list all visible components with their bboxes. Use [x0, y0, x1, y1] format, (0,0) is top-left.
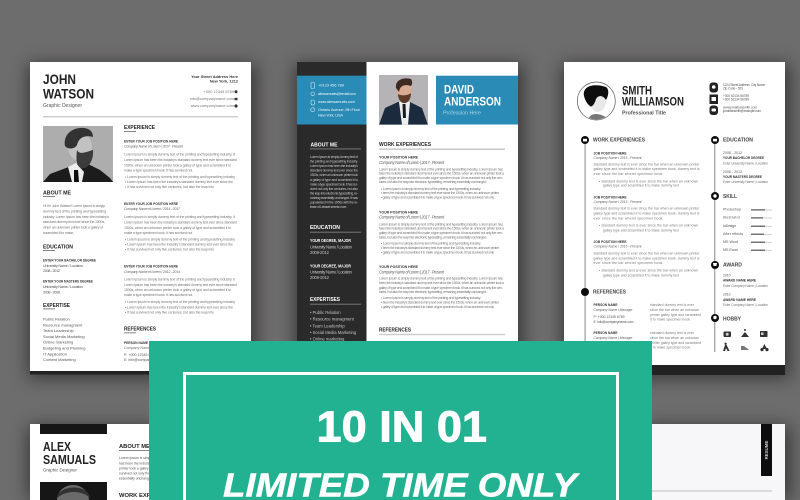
heading: name: ALEX: [43, 439, 71, 454]
reference entry: Company Name / Manager: [124, 346, 168, 350]
contact block: www.companyname.com: [191, 103, 234, 108]
heading: name: [622, 83, 684, 117]
job entry 2: Company Name of Lorem | 2017 - Present: [379, 215, 445, 220]
blue name header: DAVID: [444, 84, 474, 96]
job entry 3: Lorem Ipsum has been the industry's standard dummy text ever since standard: [124, 283, 237, 287]
expertise list: IT Application: [43, 352, 67, 356]
expertises list: • Public Relation: [310, 310, 341, 315]
expertises list: • Online marketing: [310, 337, 345, 342]
heading: references: REFERENCES: [379, 327, 411, 333]
job entry 2: 1500s, when an unknown printer took a galley of type and scrambled it to: [124, 226, 231, 230]
reference entry 1: E: info@companyname.com: [594, 320, 634, 324]
education entries: 2008 - 2012: [43, 269, 60, 273]
job entry 2: ever since the bar wheret specimen book.: [594, 216, 664, 220]
blue name header: ANDERSON: [444, 97, 501, 109]
reference entry 2: PERSON NAME: [594, 331, 618, 335]
education entries: [723, 151, 768, 184]
job entry 1: galley of type and scrambled it to make a type specimen book. It has survived not only five cen-: [379, 176, 504, 180]
heading: name: WATSON: [43, 87, 94, 102]
heading: references: REFERENCES: [593, 290, 626, 296]
job entry 2: • It has survived not only five centuries, but also the leap into: [125, 248, 214, 252]
education entries: University Name / Location: [310, 245, 353, 250]
education entries: 2008 - 2012: [723, 151, 742, 155]
heading: work experiences: [379, 142, 505, 150]
job entry 2: make a type specimen book. It has survived not.: [124, 231, 193, 235]
dark sidebar: [297, 62, 366, 352]
reference entry: P: +000 12345 6789: [124, 353, 156, 357]
heading: expertise: EXPERTISE: [43, 303, 70, 309]
heading: name: Graphic Designer: [43, 103, 82, 109]
reference entry 2: printer galley type and scrambled: [650, 341, 701, 345]
about text: make a type specimen book. It has sur-: [310, 182, 358, 186]
skill bars: Photoshop: [723, 208, 741, 212]
job entry 1: turies, but also the leap into electronic typesetting, remaining essentially unchanged.: [379, 180, 487, 184]
reference entry 2: since the bar when an unknown: [650, 336, 699, 340]
contact block: jonathansmith@example.com: [722, 109, 761, 113]
job entry 1: galley type and scrambled it to make specimen book, dummy text is: [594, 167, 700, 171]
expertise list: Team Leadership: [43, 328, 74, 333]
education entries: University Name / Location: [43, 285, 83, 289]
about text: essentially unchanged.: [119, 477, 154, 481]
banner heading: 10 IN 01: [316, 403, 487, 452]
expertise list: Social Media Marketing: [43, 334, 85, 339]
job entry 1: [594, 151, 700, 188]
heading: name: Professional Title: [622, 111, 666, 117]
job entry 3: JOB POSITION HERE: [594, 240, 627, 244]
job entry 3: galley of type and scrambled it to make a type specimen book. It has survived not only five cen-: [379, 286, 504, 290]
about text: standard dummy text ever since the: [310, 169, 358, 173]
reference entry 1: Company Name I Manager: [594, 308, 633, 312]
reference entry 2: [594, 331, 701, 350]
heading: education: EDUCATION: [43, 245, 73, 251]
reference entry 1: since the bar when an unknown: [650, 308, 699, 312]
job entry 2: [594, 196, 700, 232]
heading: expertises: EXPERTISES: [310, 297, 340, 303]
job entry 3: turies, but also the leap into electronic typesetting, remaining essentially unchanged.: [379, 290, 487, 294]
icon: education: [711, 136, 719, 144]
about text: Lorem Ipsum has been the industry's: [310, 164, 358, 168]
heading: about me: [310, 142, 361, 149]
job entry 2: • been the industry's standard dummy text ever since the 1500s, when an unknown printer: [381, 246, 500, 250]
expertise list: [43, 317, 85, 362]
job entry 3: [379, 264, 504, 309]
expertises list: [310, 310, 357, 342]
education entries: University Name / Location: [310, 269, 353, 274]
job entry 2: • galley of type and scrambled it to make a type specimen book. It has survived not only: [381, 250, 494, 254]
job entry 2: • Lorem Ipsum is simply dummy text of the printing and typesetting industry.: [381, 242, 481, 246]
job entry 1: • It has survived not only five centuries, but also the leap into: [125, 185, 214, 189]
job entry 2: Lorem Ipsum is simply dummy text of the printing and typesetting industry. Lorem Ipsum has: [379, 222, 503, 226]
job entry 3: 1500s, when an unknown printer took a galley of type and scrambled it to: [124, 288, 231, 292]
job entry 1: • Lorem Ipsum is simply dummy text of the printing and typesetting industry.: [381, 187, 481, 191]
skill bars: Illustrator: [723, 216, 741, 220]
job entry 3: • Lorem Ipsum has been the industry's standard dummy text ever since the: [125, 306, 233, 310]
award entries: 2010: [723, 293, 731, 297]
job entry 1: • Lorem Ipsum is simply dummy text of the printing and typesetting industry: [125, 175, 235, 179]
job entry 3: [124, 265, 237, 314]
job entry 1: Lorem Ipsum has been the industry's standard dummy text ever since standard: [124, 158, 237, 162]
expertises list: • Resource managment: [310, 316, 355, 322]
skill bars: InDesign: [723, 224, 736, 228]
job entry 1: Lorem Ipsum is simply dummy text of the printing and typesetting industry. It: [124, 153, 235, 157]
panel: John Watson resume: [30, 62, 251, 374]
job entry 1: 1500s, when an unknown printer took a galley of type and scrambled it to: [124, 164, 231, 168]
skill bars: MS Word: [723, 240, 738, 244]
education entries: YOUR DEGREE, MAJOR: [310, 238, 351, 243]
job entry 1: • Lorem Ipsum has been the industry's standard dummy text ever since the: [125, 180, 233, 184]
job entry 2: turies, but also the leap into electronic typesetting, remaining essentially unchanged.: [379, 236, 487, 240]
contact block: +000 52134 56789: [723, 98, 749, 102]
about text: has been the industry's: [119, 461, 154, 465]
about text: Lorem Ipsum is simply: [119, 456, 153, 460]
contact block: +000 52134 56789: [723, 94, 749, 98]
job entry 1: • been the industry's standard dummy text ever since the 1500s, when an unknown printer: [381, 191, 500, 195]
reference entry 1: it to make specimen book.: [650, 318, 691, 322]
about text: Hi I'm John Watson! Lorem Ipsum is simply: [43, 204, 105, 208]
job entry 1: • galley of type and scrambled it to make a type specimen book. It has survived not only: [381, 195, 494, 199]
education entries: 2008 - 2008: [43, 290, 60, 294]
blue name header: [436, 76, 518, 124]
job entry 1: Company Name of Lorem | 2017 - Present: [379, 160, 445, 165]
reference entry 1: standard dummy text is ever: [650, 303, 695, 307]
icon: work experiences: [581, 136, 589, 144]
job entry 1: galley type and scrambled it to make dummy text: [603, 184, 679, 188]
blue contact band: +0123 456 789: [318, 83, 345, 88]
blue name header: Profession Here: [443, 110, 481, 116]
skill bars: MS Excel: [723, 248, 738, 252]
expertise list: Online marketing: [43, 340, 73, 344]
job entry 1: standard dummy text is ever since the bar when an unknown printer: [594, 162, 700, 166]
job entry 3: Company Name I 2015 - Present: [594, 245, 643, 249]
job entry 1: • standard dummy text is ever since the bar when an unknown: [599, 179, 698, 183]
heading: name: Graphic Designer: [43, 468, 77, 474]
job entry 2: [124, 202, 237, 252]
photo: bearded man: [43, 126, 113, 182]
award entries: Enter Company Name | Location: [723, 303, 768, 307]
job entry 2: standard dummy text is ever since the bar when an unknown printer: [594, 207, 700, 211]
job entry 1: [379, 155, 504, 199]
reference entry: PERSON NAME: [124, 341, 149, 345]
heading: skill: SKILL: [723, 194, 738, 200]
education entries: 2008 - 2012: [723, 170, 742, 174]
job entry 3: ENTER YOUR JOB POSITION HERE: [124, 265, 179, 269]
reference entry 1: printer galley type and scrambled: [650, 313, 701, 317]
blue contact band: New York, USA: [318, 112, 343, 118]
about text: scrambled it to make.: [43, 231, 74, 235]
about text: [310, 155, 358, 209]
heading: education: EDUCATION: [310, 225, 340, 231]
panel: fifth resume with vertical tab: [640, 424, 785, 500]
job entry 2: • Lorem Ipsum is simply dummy text of the printing and typesetting industry: [125, 238, 235, 242]
expertise list: Resource managment: [43, 322, 83, 328]
job entry 3: • It has survived not only five centuries, but also the leap into: [125, 310, 214, 314]
expertises list: • Team Leadership: [310, 323, 345, 328]
vertical black tab: RESUME: [764, 441, 769, 459]
icon: skill: [711, 192, 719, 200]
heading: references: REFERENCES: [124, 327, 156, 333]
heading: education: EDUCATION: [723, 137, 753, 143]
hobby icons: [723, 329, 769, 351]
job entry 3: Company Name of Lorem | 2017 - Present: [379, 269, 445, 274]
icon: references: [581, 288, 589, 296]
reference entry: [124, 341, 169, 362]
heading: work experience: WORK EXP: [119, 493, 151, 499]
blue contact band: alexsamuels@email.com: [318, 91, 357, 96]
job entry 3: [594, 240, 700, 278]
about text: popularised in the 1960s with the re-: [310, 201, 358, 205]
job entry 3: make a type specimen book. It has survived not.: [124, 293, 193, 297]
about text: survived not only five: [119, 472, 151, 476]
job entry 3: Lorem Ipsum is simply dummy text of the printing and typesetting industry. It: [124, 278, 235, 282]
about text: a galley of type and scrambled it to: [310, 178, 358, 182]
heading: name: WILLIAMSON: [622, 95, 684, 109]
heading: about me: ABOUT ME: [43, 191, 71, 197]
job entry 3: • galley of type and scrambled it to make a type specimen book. It has survived not only: [381, 305, 494, 309]
job entry 2: YOUR POSITION HERE: [379, 209, 418, 214]
photo: round portrait: [577, 82, 615, 120]
contact block: [710, 82, 765, 115]
job entry 1: ENTER YOUR JOB POSITION HERE: [124, 140, 179, 144]
job entry 1: Company Name of Lorem / 2017 - Present: [124, 145, 184, 149]
contact block: +000 12345 6789: [204, 89, 234, 94]
education entries: YOUR BACHELOR DEGREE: [723, 156, 765, 160]
expertises list: • Social Media Marketing: [310, 330, 357, 335]
about text: vived not only five centuries, but also: [310, 187, 358, 191]
heading: name: [43, 439, 96, 474]
job entry 2: galley type and scrambled it to make dummy text: [603, 228, 679, 232]
about text: [119, 456, 154, 481]
about text: Lorem Ipsum is simply dummy text of: [310, 155, 358, 159]
job entry 2: Lorem Ipsum has been the industry's standard dummy text ever since standard: [124, 220, 237, 224]
black header tab: [40, 424, 107, 434]
job entry 1: Lorem Ipsum is simply dummy text of the printing and typesetting industry. Lorem Ipsum has: [379, 167, 503, 171]
job entry 1: been the industry's standard dummy text ever since the 1500s, when an unknown printer took a: [379, 172, 504, 176]
heading: about me: ABOUT ME: [310, 142, 338, 148]
education entries: ENTER YOUR MASTERS DEGREE: [43, 280, 93, 284]
panel: Alex Samuals resume: [30, 424, 160, 500]
about text: maining essentially unchanged. It was: [310, 196, 358, 200]
photo: portrait: [40, 482, 107, 500]
job entry 2: Company Name of Lorem / 2014 - 2017: [124, 207, 181, 211]
reference entry 2: Company Name I Manager: [594, 336, 633, 340]
contact block: 1224 Street Address, City Name: [723, 83, 765, 87]
education entries: Enter University Name | Location: [723, 180, 768, 184]
job entry 3: • standard dummy text is ever since the bar when an unknown: [599, 269, 698, 273]
heading: work experiences: WORK EXPERIENCES: [593, 137, 646, 143]
about text: dummy text of the printing and typesetting: [43, 210, 106, 214]
job entry 2: • standard dummy text is ever since the bar when an unknown: [599, 224, 698, 228]
job entry 2: ENTER YOUR JOB POSITION HERE: [124, 202, 179, 206]
job entry 2: galley type and scrambled it to make specimen book, dummy text is: [594, 212, 700, 216]
award entries: AWARD NAME HERE: [723, 298, 757, 302]
heading: name: JOHN: [43, 72, 76, 87]
about text: printer took a galley of: [119, 466, 152, 470]
contact block: Zip Code - 523: [723, 87, 743, 91]
reference entry 2: standard dummy text is ever: [650, 331, 695, 335]
expertise list: Content Marketing: [43, 357, 76, 362]
heading: references: [379, 327, 505, 335]
heading: work experiences: WORK EXPERIENCES: [379, 142, 431, 148]
timeline lines: [584, 140, 586, 352]
job entry 1: YOUR POSITION HERE: [379, 155, 418, 160]
job entry 3: • been the industry's standard dummy text ever since the 1500s, when an unknown printer: [381, 300, 500, 304]
icon: award: [711, 261, 719, 269]
blue contact band: Ontario Avenue, 5th Floor: [318, 107, 361, 112]
education entries: YOUR DEGREE, MAJOR: [310, 263, 351, 268]
job entry 2: JOB POSITION HERE: [594, 196, 627, 200]
job entry 1: JOB POSITION HERE: [594, 151, 627, 155]
contact block: New York, 1212: [210, 78, 239, 84]
skill bars: After effects: [723, 232, 743, 236]
education entries: [310, 238, 353, 280]
job entry 3: galley type and scrambled it to make dummy text: [603, 274, 679, 278]
job entry 2: Lorem Ipsum is simply dummy text of the printing and typesetting industry. It: [124, 215, 235, 219]
vertical black tab: [761, 424, 772, 476]
about text: lease of Letraset sheets more.: [310, 205, 347, 209]
skill bars: [723, 208, 772, 252]
job entry 3: ever since the bar wheret specimen book.: [594, 261, 664, 265]
heading: name: SMITH: [622, 83, 652, 97]
reference entry 2: it to make specimen book.: [650, 346, 691, 350]
heading: experience: EXPERIENCE: [124, 125, 155, 131]
job entry 3: galley type and scrambled it to make specimen book, dummy text is: [594, 256, 700, 260]
expertise list: Budgeting and Planning: [43, 346, 85, 350]
about text: when an unknown printer took a galley of: [43, 226, 104, 230]
job entry 2: [379, 209, 504, 254]
about text: industry. Lorem Ipsum has been the industry's: [43, 215, 109, 219]
job entry 2: Company Name I 2015 - Present: [594, 200, 643, 204]
heading: award: AWARD: [723, 263, 742, 269]
education entries: Enter University Name | Location: [723, 161, 768, 165]
reference entry 1: P: +000 12345 6789: [594, 315, 625, 319]
contact block: Your Street Address Here: [191, 74, 239, 79]
job entry 3: • Lorem Ipsum is simply dummy text of the printing and typesetting industry: [125, 300, 235, 304]
panel: Smith Williamson resume: [564, 62, 785, 375]
heading: education: [310, 225, 361, 233]
job entry 3: Lorem Ipsum is simply dummy text of the printing and typesetting industry. Lorem Ipsum has: [379, 277, 503, 281]
reference entry 1: [594, 303, 701, 324]
about text: [43, 204, 109, 235]
panel: David Anderson resume: [297, 62, 518, 352]
education entries: ENTER YOUR BACHELOR DEGREE: [43, 259, 96, 263]
education entries: 2008-2012: [310, 250, 330, 255]
job entry 3: been the industry's standard dummy text ever since the 1500s, when an unknown printer took a: [379, 281, 504, 285]
contact block: www.jonathansmith.com: [723, 105, 757, 109]
education entries: 2008-2012: [310, 275, 330, 280]
education entries: YOUR MASTERS DEGREE: [723, 175, 763, 179]
job entry 1: ever since the bar wheret specimen book.: [594, 172, 664, 176]
job entry 3: standard dummy text is ever since the bar when an unknown printer: [594, 252, 700, 256]
about text: the leap into electronic typesetting, re-: [310, 191, 358, 195]
job entry 3: • Lorem Ipsum is simply dummy text of the printing and typesetting industry.: [381, 296, 481, 300]
promo banner: [149, 341, 652, 500]
contact block: info@companyname.com: [190, 96, 234, 101]
blue contact band: [297, 76, 366, 124]
education entries: [43, 259, 96, 294]
job entry 2: been the industry's standard dummy text ever since the 1500s, when an unknown printer took a: [379, 226, 504, 230]
heading: name: SAMUALS: [43, 452, 96, 467]
job entry 2: • Lorem Ipsum has been the industry's standard dummy text ever since the: [125, 243, 233, 247]
reference entry 1: PERSON NAME: [594, 303, 618, 307]
icon: hobby: [711, 314, 719, 322]
heading: expertises: [310, 297, 361, 305]
about text: standard dummy text ever since the 1500s,: [43, 220, 105, 224]
heading: hobby: HOBBY: [723, 317, 742, 323]
blue contact band: www.alexsamuels.com: [318, 99, 356, 104]
education entries: University Name / Location: [43, 264, 83, 268]
about text: the printing and typesetting industry.: [310, 160, 358, 164]
job entry 2: galley of type and scrambled it to make a type specimen book. It has survived not only five cen-: [379, 231, 504, 235]
job entry 3: YOUR POSITION HERE: [379, 264, 418, 269]
award entries: AWARD NAME HERE: [723, 279, 757, 283]
expertise list: Public Relation: [43, 317, 70, 322]
award entries: 2010: [723, 274, 731, 278]
heading: about me: ABOUT ME: [119, 444, 150, 450]
award entries: Enter Company Name | Location: [723, 284, 768, 288]
contact block: [190, 74, 239, 108]
about text: 1500s, when an unknown printer took: [310, 173, 358, 177]
job entry 1: [124, 140, 237, 189]
heading: name: [43, 72, 94, 109]
reference entry: E: info@companyname.com: [124, 358, 169, 362]
award entries: [723, 274, 768, 307]
photo: man in suit: [379, 75, 428, 125]
job entry 1: make a type specimen book. It has survived not.: [124, 168, 193, 172]
job entry 3: Company Name of Lorem / 2012 - 2014: [124, 270, 180, 274]
job entry 1: Company Name I 2015 - Present: [594, 156, 643, 160]
banner frame: [184, 374, 618, 500]
